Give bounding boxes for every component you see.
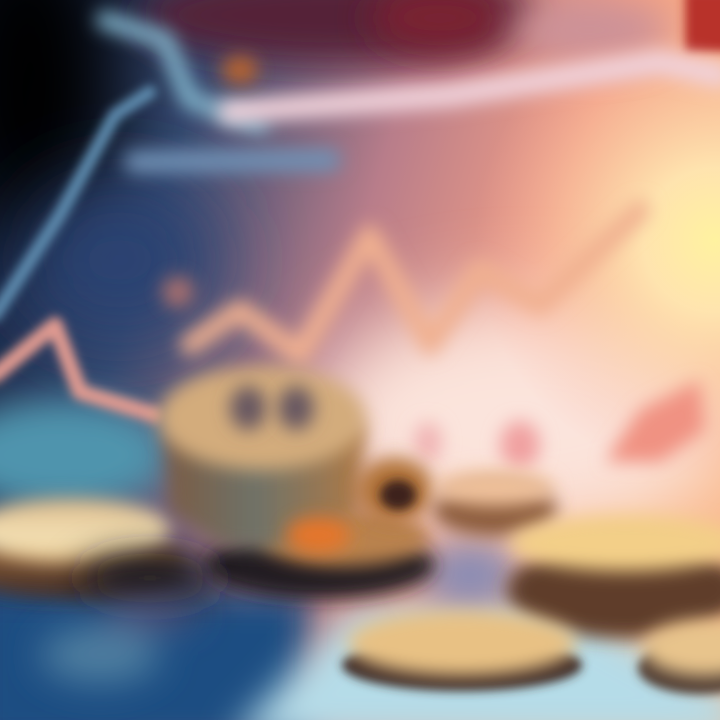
coin: small center right <box>433 470 557 536</box>
upper chart line and band <box>0 20 720 315</box>
coin: right <box>507 515 720 638</box>
orange zigzag chart line <box>0 210 640 415</box>
coin: bottom center <box>342 610 582 691</box>
coin stack: center <box>80 366 435 603</box>
small orange highlight <box>222 56 258 84</box>
faint chart marks at lower left <box>40 605 200 683</box>
coin: left <box>0 498 185 599</box>
small red bars at right <box>414 380 705 469</box>
coin: bottom right <box>638 620 720 694</box>
